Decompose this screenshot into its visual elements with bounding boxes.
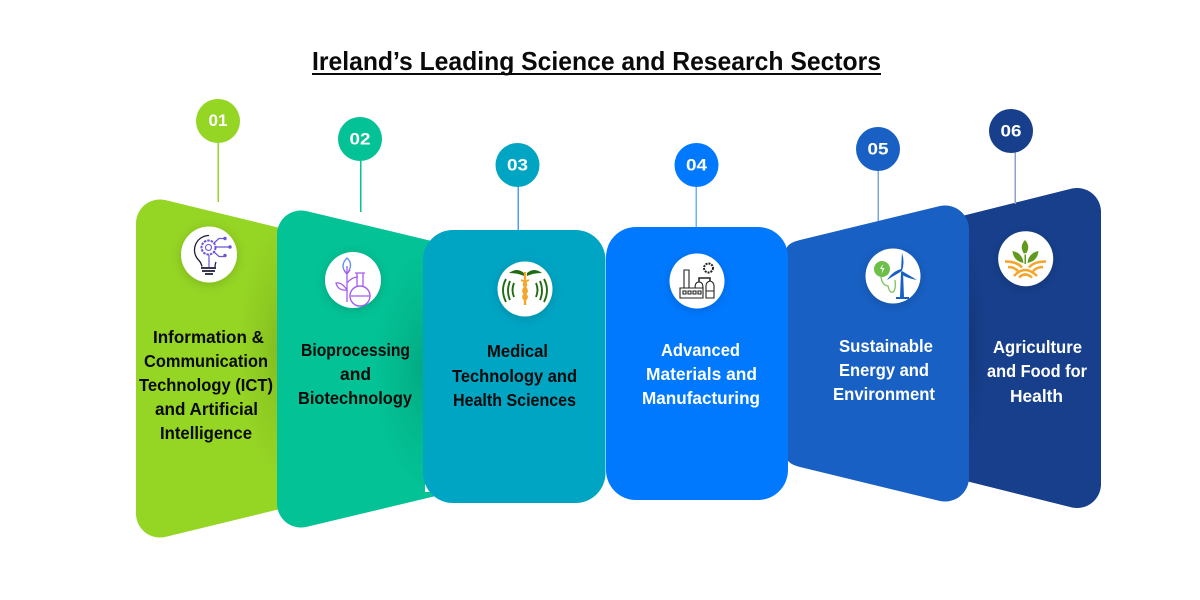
text: advanced materials: Materials and xyxy=(646,364,757,384)
icon: factory and gear xyxy=(670,254,724,308)
title: Ireland’s Leading Science and Research Sectors xyxy=(312,46,881,76)
text: ICT and AI: Technology (ICT) xyxy=(139,375,273,395)
connector 03 xyxy=(518,184,519,230)
text: sustainable energy: Environment xyxy=(833,384,935,404)
text: ICT and AI: Information & xyxy=(153,327,264,347)
panel 4: advanced materials xyxy=(606,143,788,500)
number badge 06 xyxy=(989,109,1033,153)
icon: sprout over fields xyxy=(998,231,1053,286)
text: advanced materials: Advanced xyxy=(661,340,740,360)
text: sustainable energy: Sustainable xyxy=(839,336,933,356)
connector 06 xyxy=(1014,150,1016,204)
number badge 01 xyxy=(196,99,240,143)
icon: light bulb with gear xyxy=(181,226,237,282)
text: ICT and AI xyxy=(139,327,273,443)
panel 3: medical technology xyxy=(423,143,606,503)
text: medical technology: Technology and xyxy=(452,366,577,386)
connector 04 xyxy=(696,184,697,227)
panel 6: agriculture xyxy=(950,109,1101,508)
text: agriculture: Health xyxy=(1010,386,1063,406)
text: ICT and AI: and Artificial xyxy=(155,399,258,419)
text: sustainable energy xyxy=(833,336,935,404)
number badge 05 xyxy=(856,127,900,171)
number badge 02: 02 xyxy=(350,130,370,148)
text: agriculture: and Food for xyxy=(987,361,1087,381)
number badge 05: 05 xyxy=(868,140,888,158)
icon: plant and flask xyxy=(325,252,381,308)
panel 1: ICT and AI xyxy=(136,99,323,538)
number badge 02 xyxy=(338,117,382,161)
text: advanced materials: Manufacturing xyxy=(642,388,760,408)
number badge 03 xyxy=(496,143,540,187)
text: biotechnology: Bioprocessing xyxy=(301,340,410,360)
panel 2: biotechnology xyxy=(277,117,474,528)
text: agriculture: Agriculture xyxy=(993,337,1082,357)
text: medical technology xyxy=(452,341,577,410)
connector 05 xyxy=(878,168,879,221)
number badge 03: 03 xyxy=(507,156,528,174)
text: ICT and AI: Intelligence xyxy=(160,423,252,443)
number badge 01: 01 xyxy=(208,111,228,130)
connector 01 xyxy=(218,140,219,202)
panel 5: sustainable energy xyxy=(786,127,969,502)
text: biotechnology: and xyxy=(340,364,371,384)
icon: caduceus with waves xyxy=(498,262,552,316)
number badge 06: 06 xyxy=(1000,122,1022,140)
text: agriculture xyxy=(987,337,1087,406)
text: biotechnology xyxy=(298,340,412,408)
number badge 04 xyxy=(674,143,718,187)
text: sustainable energy: Energy and xyxy=(839,360,929,380)
text: medical technology: Medical xyxy=(487,341,548,361)
text: medical technology: Health Sciences xyxy=(453,390,576,410)
icon: wind turbine and charger xyxy=(866,248,920,304)
text: advanced materials xyxy=(642,340,760,408)
text: ICT and AI: Communication xyxy=(144,351,268,371)
number badge 04: 04 xyxy=(686,156,708,174)
text: biotechnology: Biotechnology xyxy=(298,388,412,408)
connector 02 xyxy=(360,158,362,212)
